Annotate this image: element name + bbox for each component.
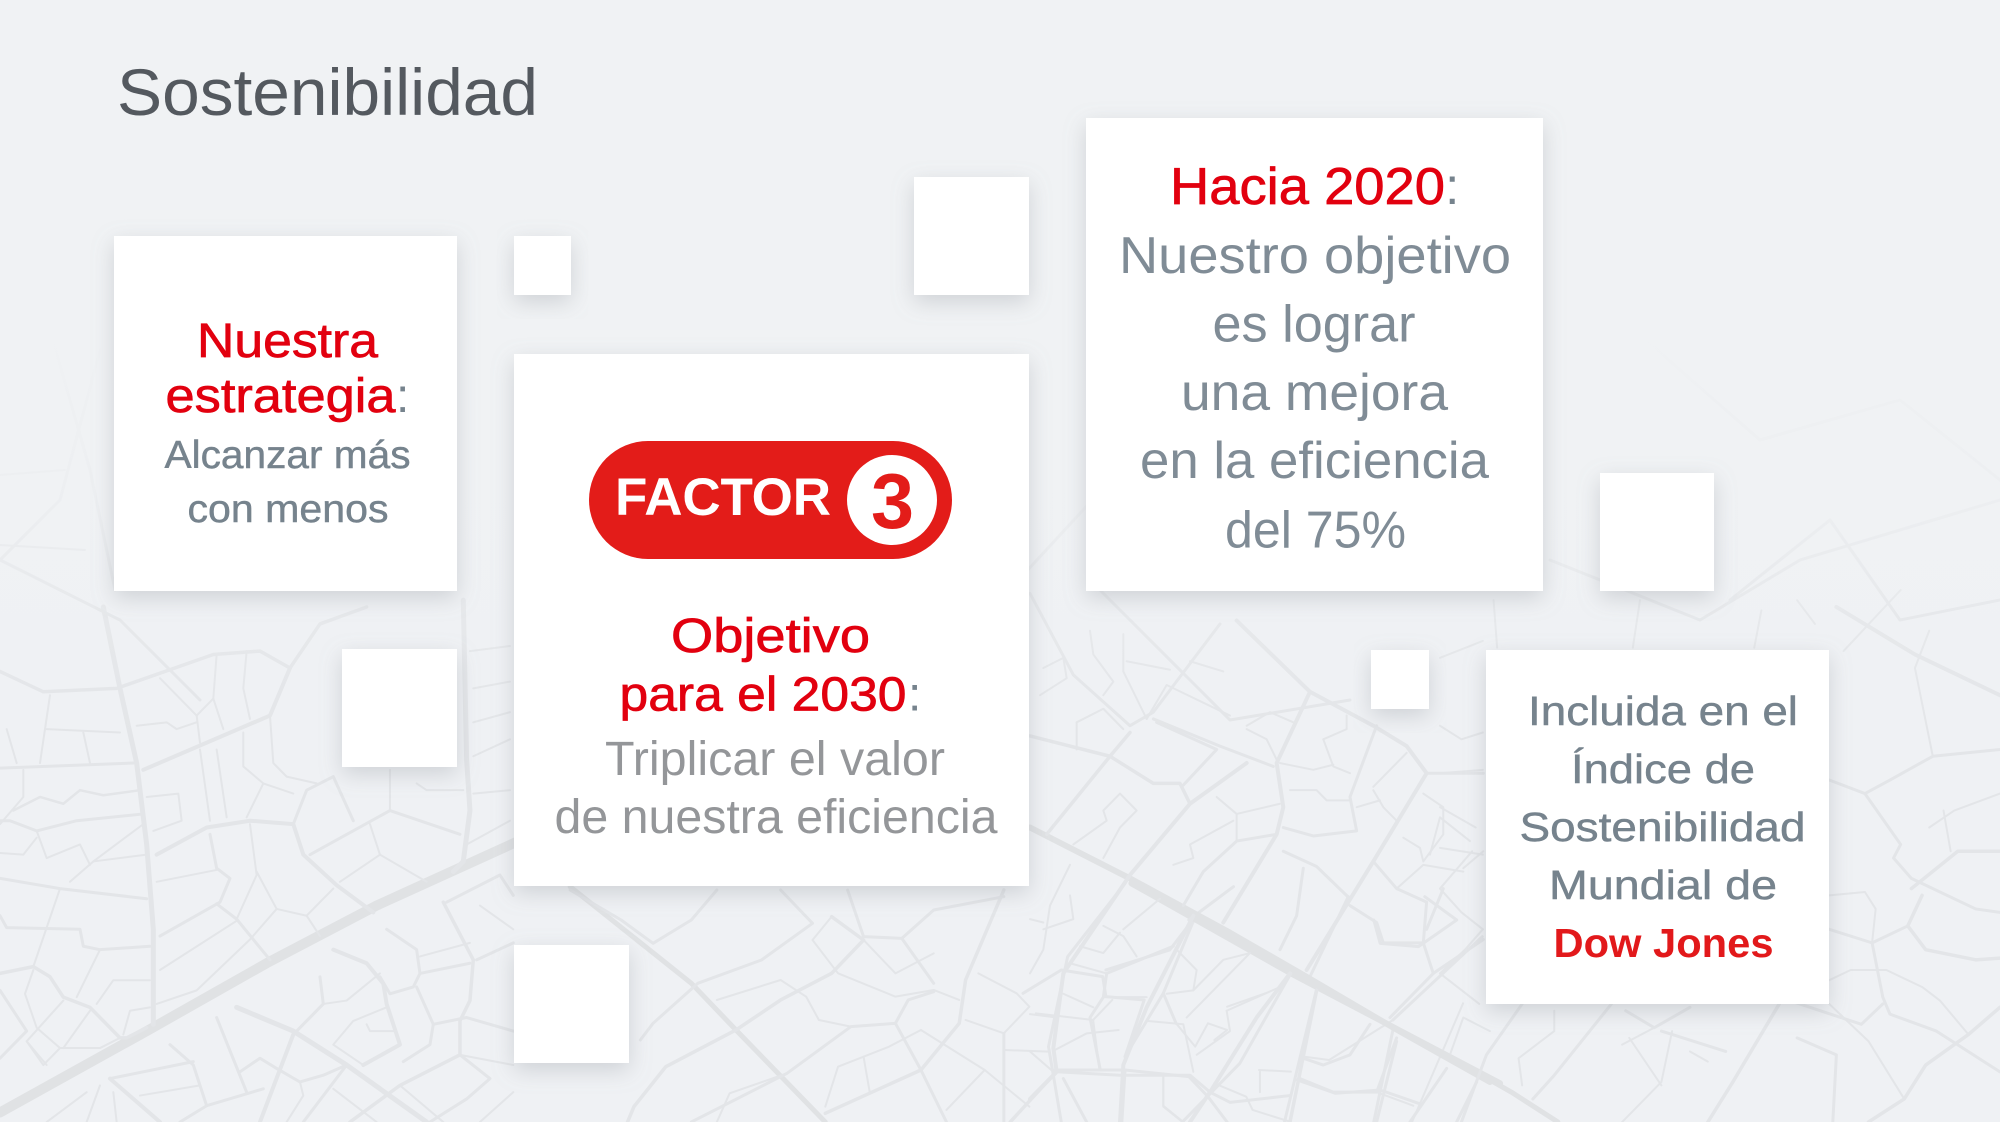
heading: objetivo para el 2030 [620, 610, 921, 722]
heading: hacia 2020: : [1445, 158, 1459, 216]
text: triplicar el valor: de nuestra eficiencia [554, 791, 998, 844]
text: índice de sostenibilidad: Sostenibilidad [1520, 804, 1806, 850]
text: índice de sostenibilidad: Incluida en el [1528, 688, 1798, 734]
decorative square: small right [1371, 650, 1429, 709]
logo: factor 3 [589, 441, 952, 559]
heading: nuestra estrategia: : [396, 370, 409, 423]
panel: nuestra estrategia [114, 236, 457, 591]
faint upper veins [0, 300, 2000, 720]
decorative square: right [1600, 473, 1714, 591]
heading: nuestra estrategia [166, 315, 409, 423]
heading: nuestra estrategia: Nuestra [197, 315, 378, 368]
text: triplicar el valor: Triplicar el valor [605, 733, 945, 786]
panel: hacia 2020 [1086, 118, 1543, 591]
text: dow jones: Dow Jones [1554, 920, 1774, 966]
text: mejora de eficiencia 75%: del 75% [1225, 502, 1406, 560]
text: índice de sostenibilidad [1520, 688, 1806, 908]
heading: hacia 2020: Hacia 2020 [1170, 158, 1445, 216]
logo: factor 3: 3 [871, 457, 914, 545]
heading: objetivo para el 2030: : [908, 668, 921, 722]
text: índice de sostenibilidad: Mundial de [1549, 862, 1777, 908]
decorative square: bottom center [514, 945, 629, 1063]
text: alcanzar más con menos [164, 434, 410, 531]
decorative square: top center [914, 177, 1029, 295]
text: mejora de eficiencia 75%: es lograr [1212, 296, 1416, 354]
decorative square: small top center [514, 236, 571, 295]
leaf vein pattern [0, 300, 2000, 1122]
heading: objetivo para el 2030: para el 2030 [620, 668, 906, 722]
text: mejora de eficiencia 75% [1119, 227, 1511, 560]
decorative square: left [342, 649, 457, 767]
text: mejora de eficiencia 75%: una mejora [1181, 364, 1448, 422]
text: alcanzar más con menos: con menos [188, 488, 388, 531]
text: alcanzar más con menos: Alcanzar más [164, 434, 410, 477]
logo: factor 3: FACTOR [615, 468, 831, 527]
title: Sostenibilidad [117, 55, 538, 129]
text: mejora de eficiencia 75%: en la eficiencia [1140, 432, 1489, 490]
text: mejora de eficiencia 75%: Nuestro objetivo [1119, 227, 1511, 285]
panel: dow jones [1486, 650, 1829, 1004]
text: índice de sostenibilidad: Índice de [1571, 746, 1755, 792]
panel: factor 3 objetivo 2030 [514, 354, 1029, 886]
text: triplicar el valor [554, 733, 998, 844]
heading: objetivo para el 2030: Objetivo [671, 610, 870, 663]
heading: nuestra estrategia: estrategia [166, 370, 396, 423]
